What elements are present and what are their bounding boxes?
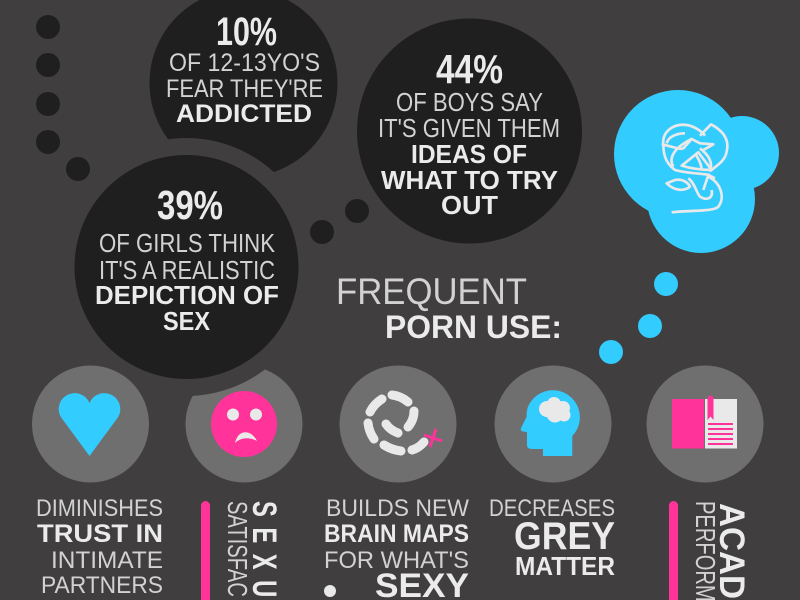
bubble: 44 percent of boys	[357, 18, 582, 244]
bubble: 39 percent of girls: 39%	[157, 182, 223, 228]
text: diminishes trust: PARTNERS	[41, 572, 163, 599]
bubble: 44 percent of boys: IDEAS OF	[411, 139, 527, 169]
vertical text: academic performance: PERFORM	[689, 501, 720, 600]
bubble: 10 percent addicted: ADDICTED	[176, 100, 312, 128]
text: builds new brain maps: FOR WHAT'S	[324, 547, 469, 574]
bubble: 39 percent of girls: DEPICTION OF	[95, 280, 279, 310]
text: diminishes trust: DIMINISHES	[36, 495, 163, 522]
bubble: 10 percent addicted: 10%	[216, 10, 277, 54]
bubble: 44 percent of boys: WHAT TO TRY	[381, 165, 558, 195]
text: diminishes trust: INTIMATE	[51, 547, 163, 574]
heading: frequent porn use: PORN USE:	[385, 309, 562, 345]
bubble: 44 percent of boys: IT'S GIVEN THEM	[378, 113, 560, 143]
text: decreases grey matter: DECREASES	[489, 495, 615, 522]
bubble: 39 percent of girls: IT'S A REALISTIC	[99, 255, 275, 285]
text: diminishes trust: TRUST IN	[37, 520, 163, 548]
bubble: 39 percent of girls: SEX	[163, 306, 211, 336]
vertical text: sexual satisfaction: SATISFAC	[221, 501, 252, 597]
icon: brain map dashes and cross	[368, 395, 442, 451]
icon circle: sexual satisfaction background	[186, 366, 302, 482]
thought dots: left trail	[36, 15, 90, 181]
icon: heart	[59, 393, 120, 456]
icon circles: remaining backgrounds	[32, 366, 764, 482]
heading: frequent porn use	[336, 271, 562, 345]
bubble: 44 percent of boys: OUT	[441, 190, 498, 220]
text: builds new brain maps	[324, 495, 469, 600]
bubble: 10 percent addicted: OF 12-13YO'S	[169, 49, 320, 77]
pink bar: academic performance	[669, 501, 678, 600]
bubble: 44 percent of boys: 44%	[436, 46, 503, 92]
bubble: 44 percent of boys: OF BOYS SAY	[396, 87, 543, 117]
icon: open book	[672, 396, 737, 448]
icon: sad face	[211, 391, 277, 457]
vertical text: academic performance: ACAD	[712, 503, 751, 599]
thought dots: blue trail	[599, 272, 678, 364]
text: builds new brain maps: BUILDS NEW	[326, 495, 469, 522]
text: diminishes trust	[36, 495, 163, 599]
vertical text: academic performance	[689, 501, 751, 600]
bubble: 10 percent addicted: FEAR THEY'RE	[166, 75, 323, 103]
vertical text: sexual satisfaction	[221, 501, 283, 600]
bubble: 39 percent of girls	[74, 155, 298, 379]
bubble: 10 percent addicted	[58, 0, 338, 396]
text: builds new brain maps: BRAIN MAPS	[324, 520, 469, 548]
thought dots: middle trail	[310, 199, 369, 244]
pink bar: sexual satisfaction	[201, 501, 210, 600]
blue thought cloud with scribble	[614, 90, 779, 253]
text: decreases grey matter: GREY	[514, 515, 615, 558]
heading: frequent porn use: FREQUENT	[336, 271, 527, 312]
bubble: 39 percent of girls: OF GIRLS THINK	[99, 228, 276, 258]
text: decreases grey matter: MATTER	[515, 551, 615, 581]
text: decreases grey matter	[489, 495, 615, 581]
icon: head with brain	[521, 390, 580, 456]
